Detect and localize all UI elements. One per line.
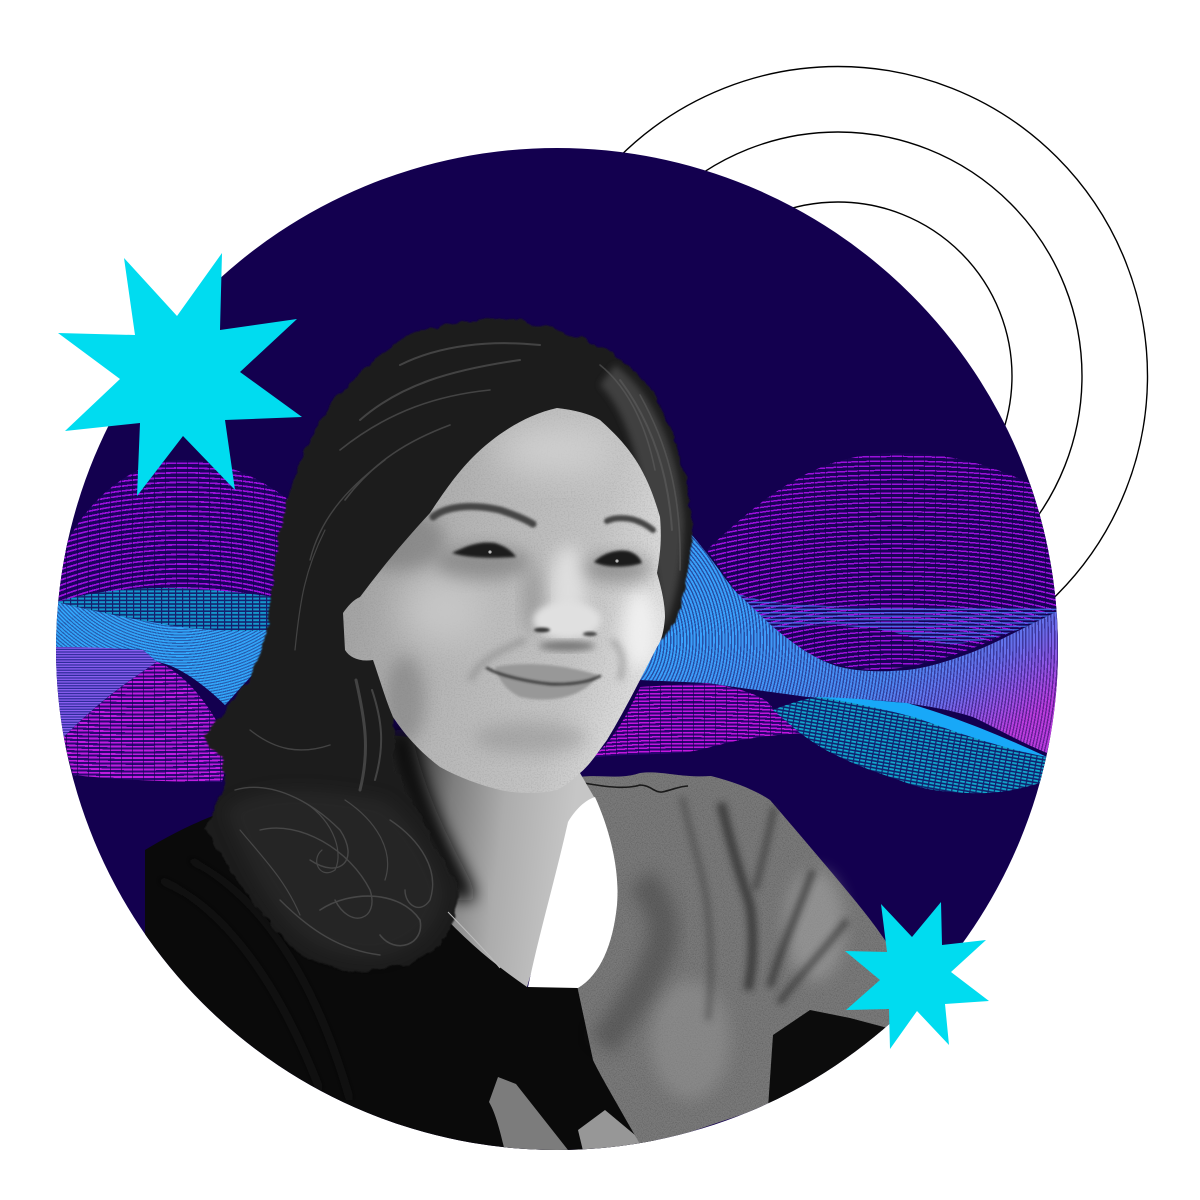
- cyan star small: [845, 902, 989, 1049]
- navy background disc: [56, 148, 1058, 1150]
- shirt light and shadow modelling: [650, 870, 845, 1100]
- hair strands: [235, 343, 680, 955]
- concentric outline rings: [528, 66, 1148, 686]
- lower curls tone: [241, 802, 432, 946]
- wave: left lower purple dome: [63, 662, 235, 782]
- hair mass: [205, 320, 692, 971]
- wave: bright blue streak: [817, 697, 1047, 757]
- face: [343, 408, 665, 793]
- white chest highlight: [528, 797, 618, 988]
- wave: right purple dome: [707, 453, 1060, 670]
- mouth: [487, 664, 600, 700]
- cardigan lower lapel stripes: [489, 1077, 641, 1155]
- hair: [205, 320, 692, 971]
- hair shadow on neck: [398, 730, 462, 900]
- shirt collar seam: [578, 782, 688, 792]
- face tonal modelling: [355, 426, 658, 754]
- shirt: [560, 772, 893, 1146]
- wave: right blue ribbon: [640, 533, 1060, 753]
- wave: lower teal sweep: [773, 697, 1047, 793]
- cyan star large: [58, 253, 302, 496]
- eyebrows: [433, 506, 653, 530]
- right hair tone: [600, 365, 684, 630]
- wave: left violet lens: [56, 647, 157, 738]
- sleeve shadow: [768, 1010, 886, 1104]
- wave: left blue ribbon: [56, 602, 275, 705]
- eyes: [452, 542, 642, 567]
- nose: [533, 602, 601, 651]
- wave: lower purple lobe: [590, 683, 807, 758]
- shirt folds: [602, 797, 847, 1045]
- wave: blue band across dome: [737, 593, 1060, 644]
- wave: left purple dome: [56, 460, 295, 602]
- necklace: [448, 912, 500, 968]
- mesh waves: [56, 453, 1060, 793]
- portrait figure: [145, 320, 895, 1160]
- wave: left teal lens: [56, 588, 275, 633]
- neck: [390, 735, 594, 987]
- cardigan: [145, 815, 665, 1160]
